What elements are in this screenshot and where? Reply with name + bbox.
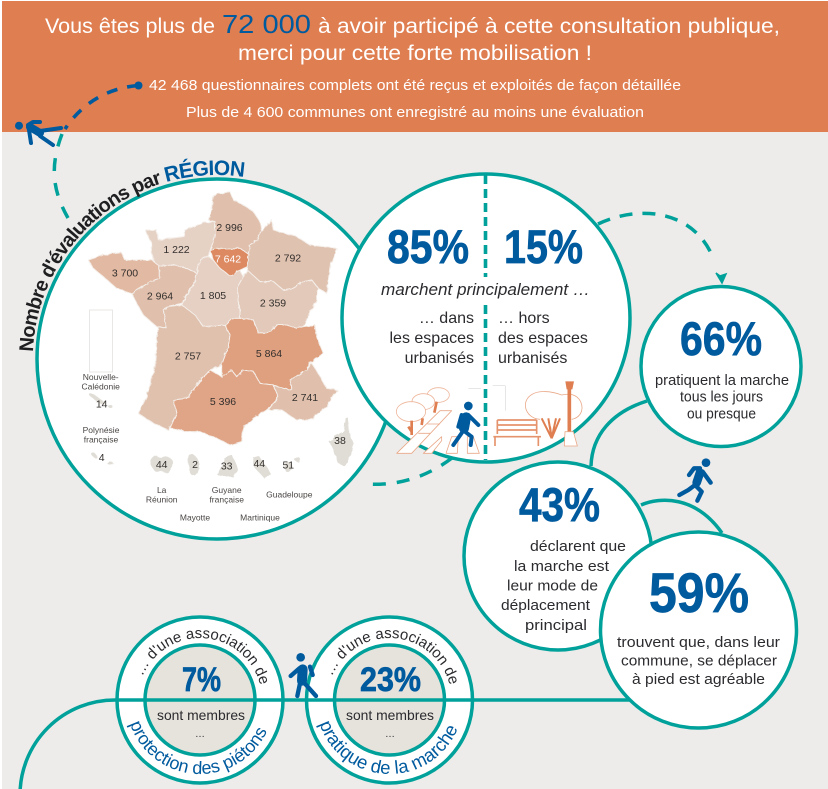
text: hors des espaces urbanisés: urbanisés (498, 350, 567, 367)
illustration: trees and crosswalk (396, 386, 505, 453)
map values: 44 (156, 459, 168, 471)
description: commune, se déplacer (621, 654, 777, 670)
map values: 14 (96, 398, 108, 410)
region: Centre-Val de Loire (182, 256, 243, 327)
dashed arrow to 66 circle (598, 213, 726, 283)
description (617, 635, 780, 688)
stat: 15%: 15% (504, 220, 583, 273)
text: hors des espaces urbanisés: des espaces (498, 330, 588, 347)
map values: 2 792 (275, 252, 301, 264)
panel: 43% main mode (464, 462, 652, 650)
description: pratiquent la marche (655, 373, 789, 389)
map values: 1 222 (163, 244, 190, 256)
panel: map by region (37, 179, 397, 539)
map values: 2 996 (216, 222, 243, 234)
map values: 44 (253, 458, 265, 470)
description: leur mode de (507, 578, 598, 594)
description: la marche est (514, 559, 609, 575)
ring text bottom: pratique de la marche (316, 721, 457, 774)
caption: sont membres (157, 707, 245, 723)
icon: walker between circles (679, 458, 711, 501)
map values: 5 864 (256, 348, 282, 360)
map values: 1 805 (200, 290, 226, 302)
communes stat: Plus de 4 600 communes ont enregistré au moins une évaluation (186, 105, 644, 121)
stat: 7%: 7% (182, 661, 221, 699)
stat: 66%: 66% (680, 312, 762, 365)
description (655, 373, 789, 422)
region: Corse (329, 417, 353, 467)
overseas labels: Nouvelle- (83, 372, 119, 382)
panel: association practice (304, 615, 474, 785)
map values: 2 964 (147, 290, 173, 302)
overseas labels (82, 310, 313, 522)
panel: 85 / 15 urban walking (342, 174, 630, 462)
overseas labels: Polynésie (83, 425, 120, 435)
region: Provence-Alpes-Côte d'Azur (268, 363, 337, 420)
map title: Nombre d'évaluations par RÉGION (19, 158, 244, 351)
overseas labels: La (157, 485, 167, 495)
region: Normandie (145, 222, 215, 273)
region: Bretagne (88, 253, 159, 293)
ellipsis: … (385, 729, 395, 740)
stat: 85%: 85% (387, 220, 469, 273)
ring text bottom: protection des piétons (126, 721, 266, 774)
map values (96, 222, 346, 472)
map values: 51 (282, 460, 294, 472)
map of France (88, 192, 353, 467)
connector lines (20, 401, 722, 789)
map values: 2 359 (260, 298, 286, 310)
overseas labels: française (84, 434, 119, 444)
text: dans les espaces urbanisés (390, 310, 474, 367)
overseas labels: Guyane (212, 485, 242, 495)
overseas labels: Réunion (146, 494, 178, 504)
description: principal (525, 618, 587, 634)
icon: walker between associations (291, 653, 316, 696)
headline: merci pour cette forte mobilisation ! (238, 42, 592, 65)
panel: 66% daily walking (641, 286, 801, 446)
map values: 2 757 (175, 350, 201, 362)
map values: 5 396 (210, 396, 236, 408)
region: Auvergne-Rhône-Alpes (222, 318, 323, 390)
illustration: bench, bush and lamp (493, 381, 582, 446)
stat: 59%: 59% (649, 561, 749, 624)
region: Grand Est (247, 220, 337, 293)
line between association circles (283, 698, 310, 702)
ring text top: … d'une association de (142, 630, 268, 684)
map values: 3 700 (112, 268, 138, 280)
description: ou presque (687, 406, 756, 422)
text: hors des espaces urbanisés (498, 310, 588, 367)
description (501, 539, 626, 634)
region: Hauts-de-France (208, 192, 262, 254)
region: Île-de-France (210, 248, 248, 276)
map values: 7 642 (215, 254, 241, 266)
questionnaires stat: 42 468 questionnaires complets ont été reçus et exploités de façon détaillée (149, 78, 681, 94)
text: hors des espaces urbanisés: … hors (498, 310, 550, 327)
map values: 2 (192, 459, 198, 471)
region: Bourgogne-Franche-Comté (237, 270, 318, 333)
map values: 33 (221, 460, 233, 472)
description: déplacement (501, 598, 590, 614)
stat: 23%: 23% (360, 661, 421, 699)
dashed teal path to map (54, 134, 68, 218)
ring text top: … d'une association de (331, 630, 457, 684)
description: trouvent que, dans leur (617, 635, 780, 651)
map values: 4 (99, 452, 105, 464)
region: Occitanie (170, 370, 278, 445)
dashed arrow: blue from stat to walker (65, 82, 142, 129)
icon: falling walker (15, 122, 61, 145)
overseas labels: française (209, 494, 244, 504)
caption: marchent principalement: marchent principalement … (381, 281, 590, 299)
text: dans les espaces urbanisés: urbanisés (405, 350, 474, 367)
overseas labels: Martinique (240, 512, 280, 522)
text: dans les espaces urbanisés: les espaces (390, 330, 474, 347)
headline: Vous êtes plus de (45, 15, 215, 38)
region: Pays de la Loire (132, 265, 197, 328)
overseas labels: Calédonie (82, 382, 120, 392)
overseas islands (90, 394, 300, 477)
map values: 2 741 (292, 392, 318, 404)
dashed teal link below 85 circle (368, 458, 452, 484)
headline: à avoir participé à cette consultation publique, (318, 15, 780, 38)
icon: walker on crosswalk (453, 402, 478, 445)
description: à pied est agréable (632, 672, 765, 688)
caption: sont membres (346, 707, 434, 723)
description: déclarent que (530, 539, 626, 555)
panel: association protection (115, 615, 285, 785)
headline: 72 000 (222, 9, 311, 39)
overseas labels: Guadeloupe (266, 490, 313, 500)
overseas labels: Mayotte (180, 512, 210, 522)
text: dans les espaces urbanisés: … dans (419, 310, 474, 327)
region: Nouvelle-Aquitaine (138, 305, 230, 430)
panel: 59% pleasant (600, 532, 796, 728)
map values: 38 (334, 435, 346, 447)
header banner (2, 1, 828, 132)
headline (45, 9, 780, 65)
description: tous les jours (680, 390, 763, 406)
stat: 43%: 43% (519, 478, 600, 531)
ellipsis: … (195, 729, 205, 740)
